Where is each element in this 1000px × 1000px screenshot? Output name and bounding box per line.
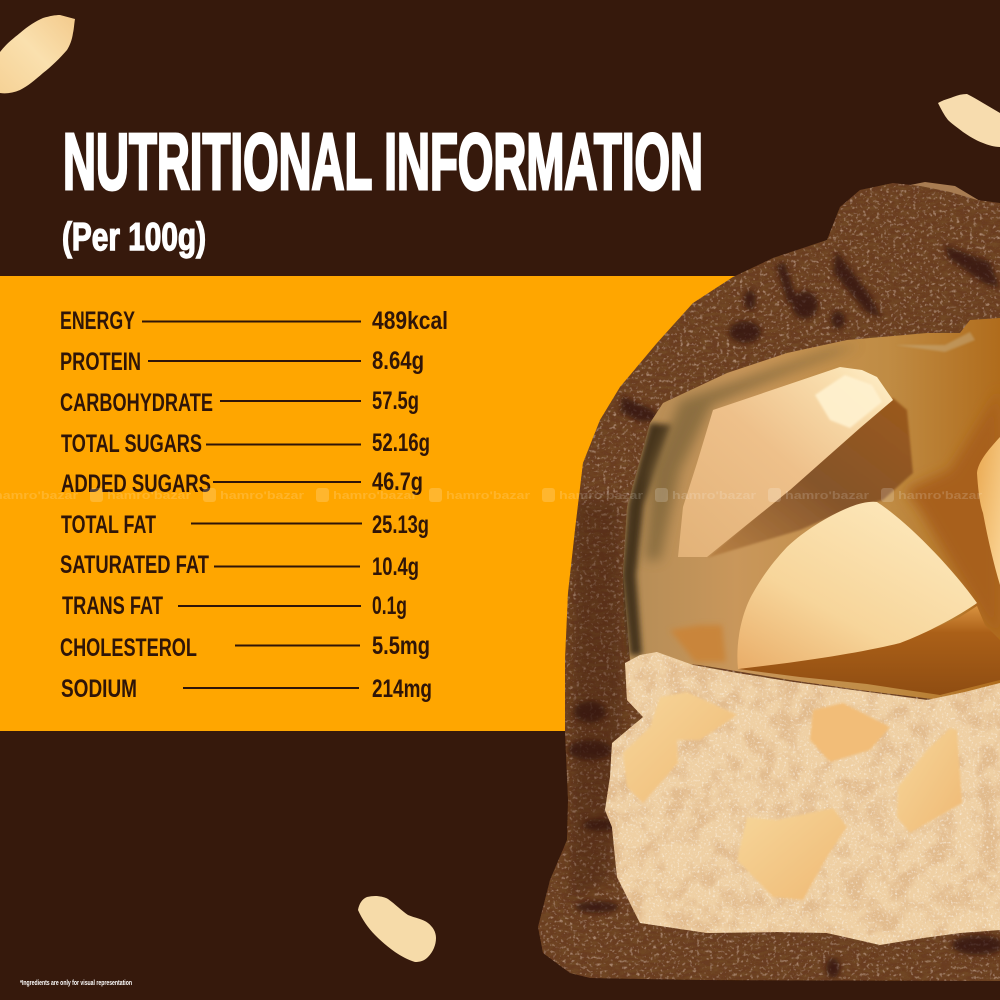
row: trans fat (62, 592, 407, 620)
caramel top light reflection (895, 332, 975, 352)
nutrition table (60, 307, 448, 703)
row: added sugars (61, 468, 423, 498)
decorative peanut: bottom (358, 896, 436, 962)
watermark strip: hamro'bazar (672, 490, 757, 502)
caramel right glow (902, 406, 998, 626)
row: trans fat: TRANS FAT (62, 592, 163, 620)
watermark strip (0, 488, 983, 502)
row: energy: 489kcal (372, 307, 448, 335)
watermark strip: hamro'bazar (898, 490, 983, 502)
row: sodium: 214mg (372, 675, 432, 703)
caramel olive band (645, 345, 860, 560)
row: energy (60, 307, 448, 335)
row: protein (60, 347, 424, 376)
row: cholesterol: 5.5mg (372, 632, 430, 660)
row: saturated fat (60, 551, 419, 581)
peanut: lower half skin (738, 606, 1000, 695)
subtitle: (Per 100g) (62, 216, 206, 259)
watermark strip: hamro'bazar (107, 490, 192, 502)
row: total sugars (61, 429, 430, 458)
image: cross-section of chocolate bar (538, 182, 1000, 981)
decorative peanut: top right (938, 94, 1000, 147)
watermark strip: hamro'bazar (559, 490, 644, 502)
row: protein: PROTEIN (60, 348, 141, 376)
orange band (0, 276, 760, 731)
caramel orange drip (670, 625, 726, 662)
row: added sugars: 46.7g (372, 468, 423, 496)
row: cholesterol: CHOLESTEROL (60, 634, 197, 662)
row: trans fat: 0.1g (372, 592, 407, 620)
row: added sugars: ADDED SUGARS (61, 470, 211, 498)
row: total fat: TOTAL FAT (61, 511, 156, 539)
row: cholesterol (60, 632, 430, 662)
footnote: *Ingredients are only for visual representation (20, 978, 132, 987)
caramel bump on top (905, 182, 985, 215)
row: saturated fat: 10.4g (372, 553, 419, 581)
row: sodium: SODIUM (61, 675, 137, 703)
watermark strip: hamro'bazar (220, 490, 305, 502)
caramel shadow at left (622, 423, 672, 655)
nougat layer (605, 652, 1000, 945)
row: carbohydrate: CARBOHYDRATE (60, 389, 213, 417)
nougat peanut chunks (623, 692, 962, 900)
row: total fat (61, 511, 429, 539)
peanut: upper half kernel (678, 367, 893, 557)
row: saturated fat: SATURATED FAT (60, 551, 209, 579)
peanut: upper half skin (707, 398, 913, 558)
chocolate folds (568, 245, 1000, 978)
row: total sugars: 52.16g (372, 429, 430, 457)
shell lower darker band (570, 500, 622, 900)
watermark strip: hamro'bazar (446, 490, 531, 502)
peanut: right edge (977, 437, 1000, 585)
peanut: upper kernel facet (815, 375, 882, 428)
caramel layer (623, 318, 1000, 700)
chocolate shell (538, 183, 1000, 981)
row: total fat: 25.13g (372, 511, 429, 539)
decorative peanut: top left (0, 15, 75, 93)
row: carbohydrate (60, 387, 419, 417)
watermark strip: hamro'bazar (333, 490, 418, 502)
watermark strip: hamro'bazar (785, 490, 870, 502)
row: energy: ENERGY (60, 307, 135, 335)
row: total sugars: TOTAL SUGARS (61, 430, 202, 458)
row: protein: 8.64g (372, 347, 424, 375)
row: carbohydrate: 57.5g (372, 387, 419, 415)
row: sodium (61, 675, 432, 703)
peanut: lower half kernel (737, 502, 977, 669)
